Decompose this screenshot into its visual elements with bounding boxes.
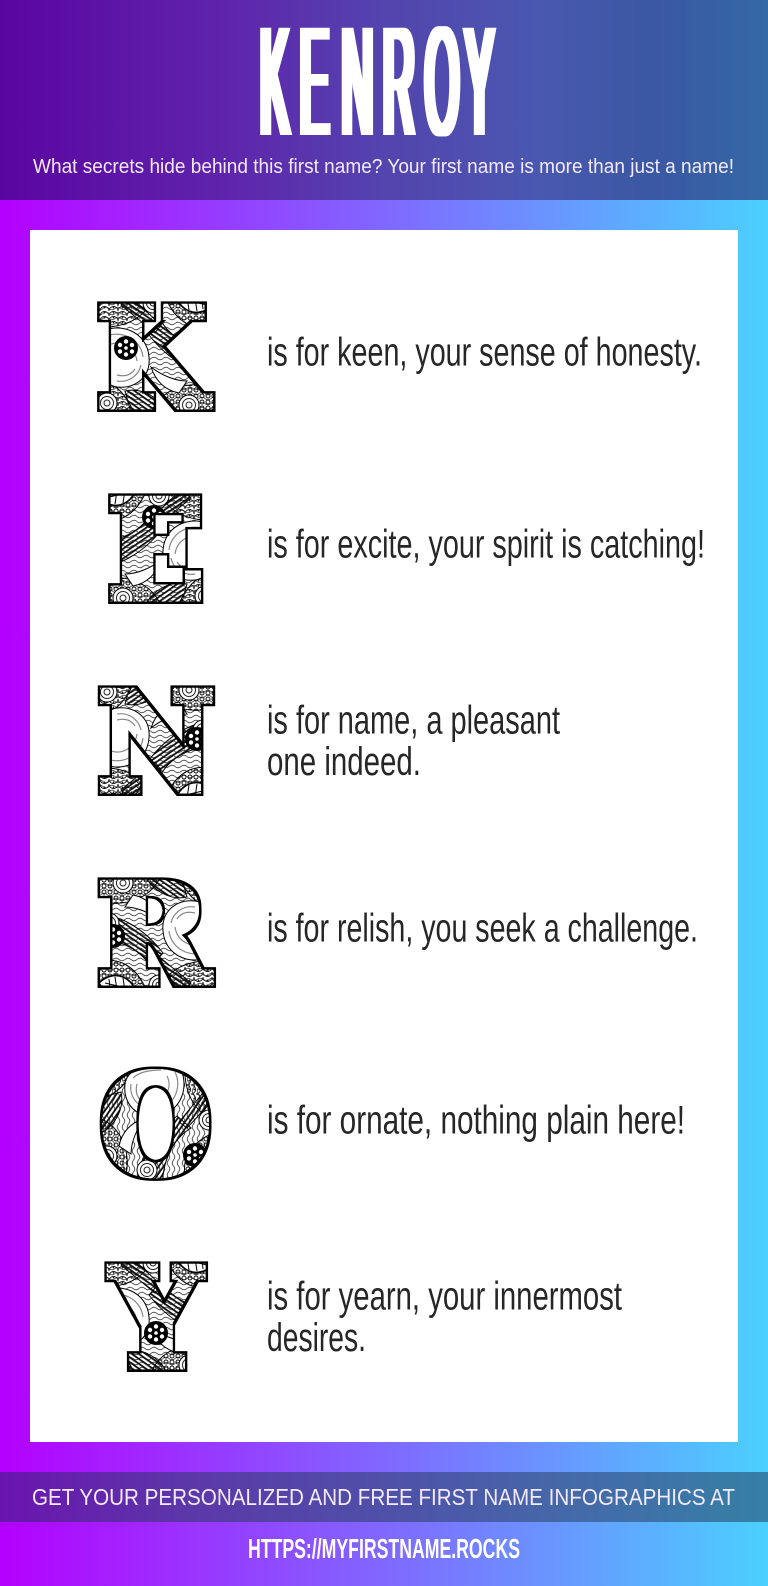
letter R row [98, 856, 698, 1014]
text: N lines: is for name, a pleasant [267, 698, 560, 742]
letter Y row [110, 1240, 622, 1398]
icon: patterned letter E: E [108, 472, 204, 630]
header band [0, 0, 768, 200]
footer band [0, 1472, 768, 1522]
icon: patterned letter N: N [98, 664, 214, 822]
letter O row [101, 1046, 685, 1204]
text: N lines: one indeed. [267, 740, 421, 784]
text: Y lines: is for yearn, your innermost [267, 1274, 622, 1318]
footer url: HTTPS://MYFIRSTNAME.ROCKS [248, 1533, 520, 1564]
icon: patterned letter Y: Y [110, 1240, 202, 1398]
icon: patterned letter K: K [98, 280, 210, 438]
icon: patterned letter R: R [98, 856, 210, 1014]
subtitle: What secrets hide behind this first name? Your first name is more than just a name! [33, 155, 734, 178]
letter E row [108, 472, 705, 630]
text: Y lines: desires. [267, 1316, 366, 1360]
letter N row [98, 664, 560, 822]
letter K row [98, 280, 702, 438]
icon: patterned letter O: O [101, 1046, 211, 1204]
white content panel [30, 230, 738, 1442]
